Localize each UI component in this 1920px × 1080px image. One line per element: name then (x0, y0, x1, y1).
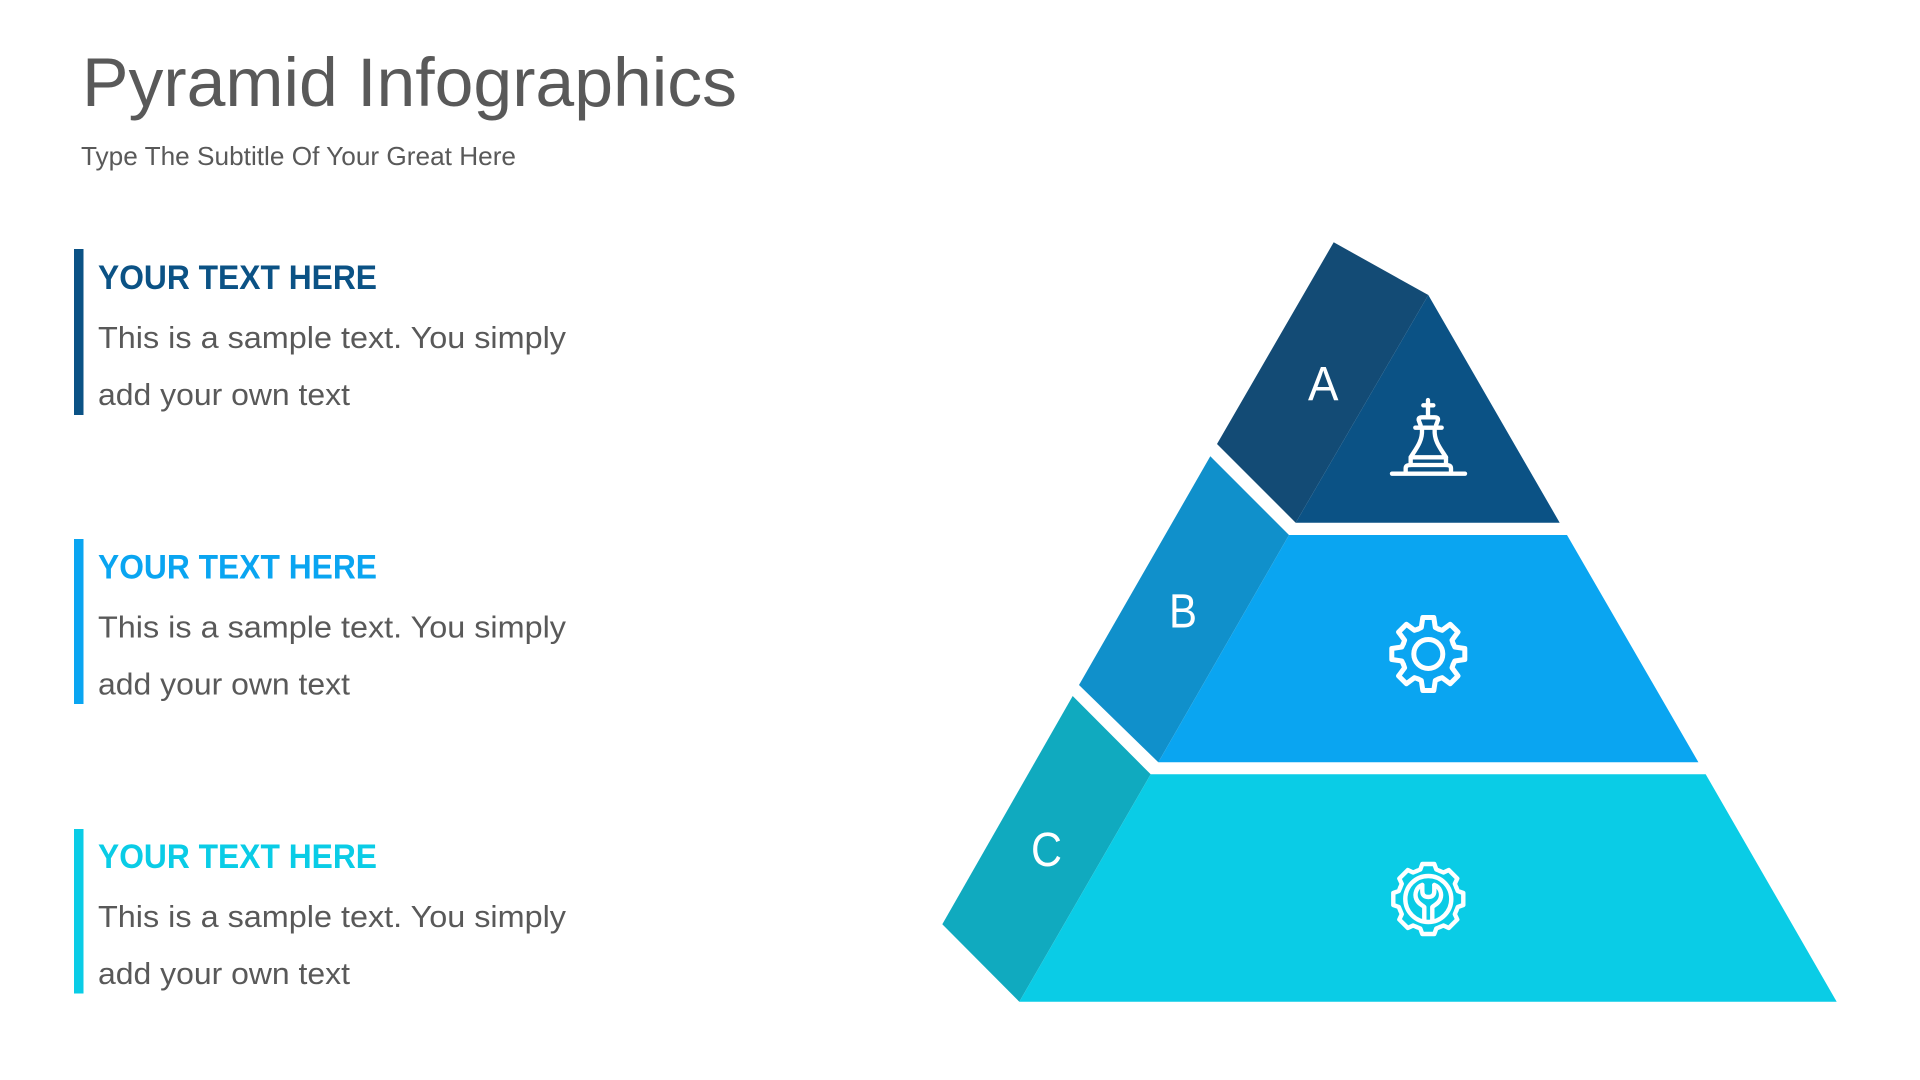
pyramid tier A (1217, 242, 1560, 523)
body text C: This is a sample text. You simply (98, 899, 567, 934)
panel: text block B (74, 539, 567, 704)
tier A front face (1296, 295, 1560, 523)
heading A: YOUR TEXT HERE (98, 259, 377, 297)
heading C: YOUR TEXT HERE (98, 838, 377, 876)
subtitle: Type The Subtitle Of Your Great Here (81, 141, 516, 171)
panel: text block C (74, 829, 567, 994)
accent bar C (74, 829, 84, 994)
tier B side face (1079, 456, 1289, 762)
tier A side face (1217, 242, 1428, 523)
title: Pyramid Infographics (82, 44, 737, 121)
pyramid tier B (1079, 456, 1698, 762)
icon: wrench gear (1393, 864, 1463, 934)
heading B: YOUR TEXT HERE (98, 548, 377, 586)
body text A (98, 320, 567, 412)
tier C front face (1019, 774, 1837, 1002)
body text B (98, 610, 567, 702)
tier C side face (942, 696, 1151, 1002)
accent bar A (74, 249, 84, 415)
icon: chess king (1392, 400, 1465, 474)
tier B letter: B (1169, 586, 1197, 638)
body text B: add your own text (98, 666, 350, 702)
tier C letter: C (1031, 824, 1062, 877)
body text A: This is a sample text. You simply (98, 320, 567, 355)
tier B front face (1158, 535, 1698, 762)
pyramid chart (942, 242, 1837, 1002)
pyramid tier C (942, 696, 1837, 1002)
tier A letter: A (1308, 358, 1338, 411)
body text A: add your own text (98, 377, 350, 412)
panel: text block A (74, 249, 567, 415)
body text C (98, 899, 567, 991)
accent bar B (74, 539, 84, 704)
body text B: This is a sample text. You simply (98, 610, 567, 644)
icon: gear (1392, 618, 1465, 690)
body text C: add your own text (98, 956, 350, 991)
